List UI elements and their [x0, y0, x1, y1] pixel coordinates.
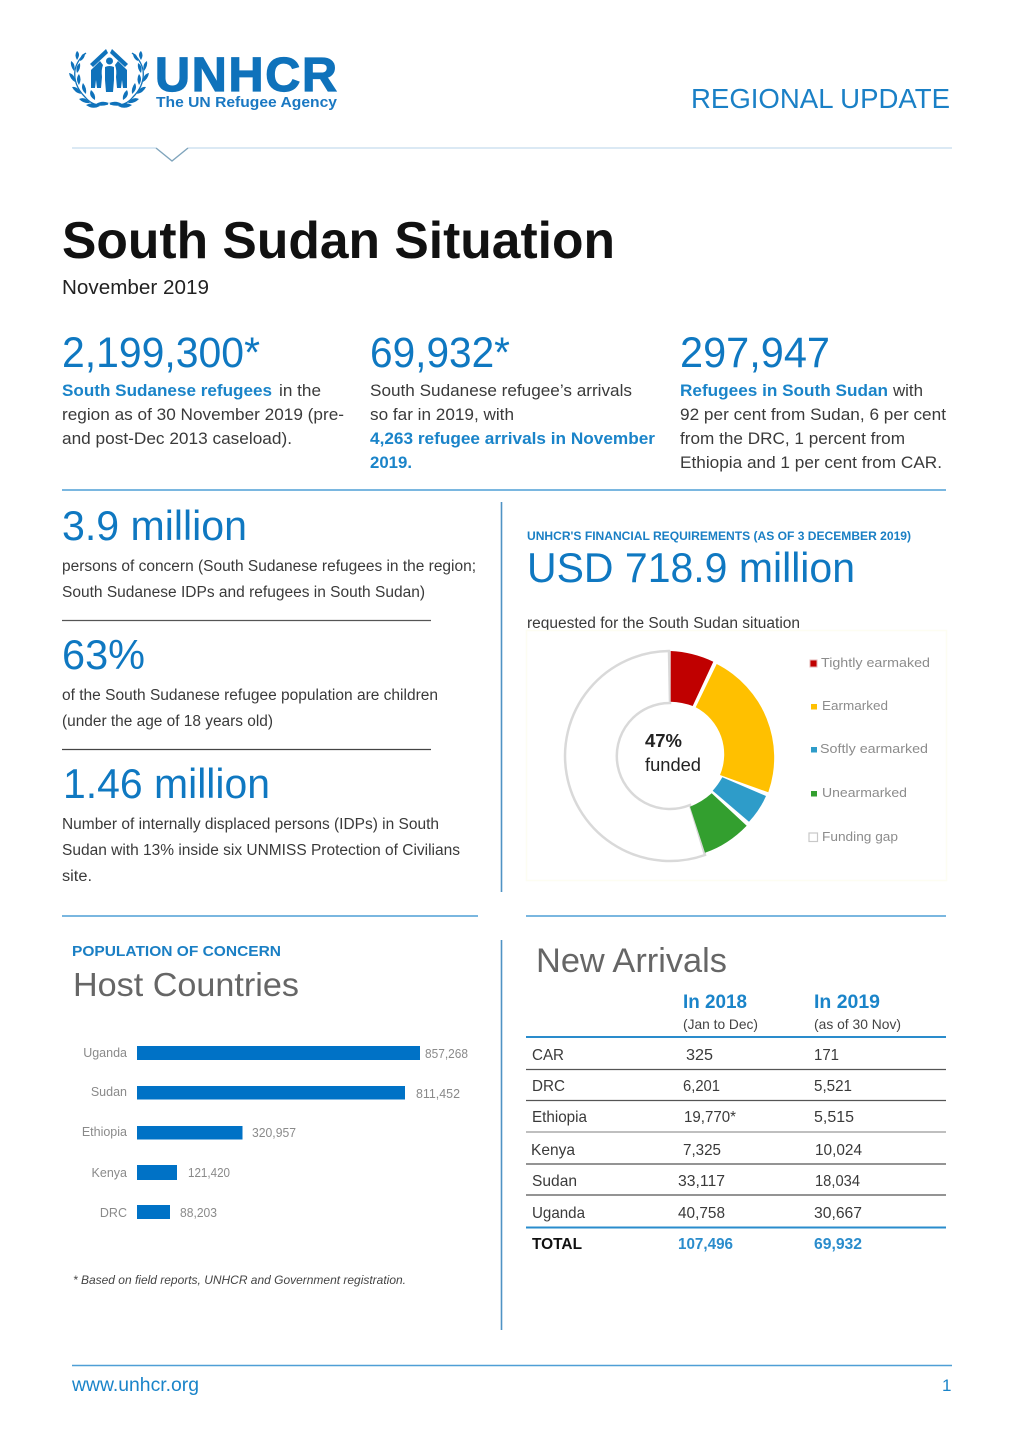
- panel: host countries: [72, 943, 468, 1287]
- panel: arrivals 2019: South Sudanese refugee’s arrivals: [370, 382, 632, 400]
- panel: arrivals 2019: 4,263 refugee arrivals in November: [370, 430, 656, 448]
- new arrivals table: Ethiopia: [532, 1109, 587, 1126]
- new arrivals table: DRC: [532, 1078, 565, 1095]
- legend: Funding gap: [822, 829, 898, 844]
- stat: 1.46 million: site.: [62, 868, 92, 885]
- stat: 1.46 million: Number of internally displaced persons (IDPs) in South: [62, 816, 439, 833]
- footer url: www.unhcr.org: [71, 1375, 199, 1396]
- bar chart: 121,420: [188, 1166, 230, 1180]
- new arrivals table: Kenya: [531, 1142, 575, 1159]
- panel: refugees in region: [62, 329, 344, 448]
- icon: UNHCR emblem: [69, 49, 149, 108]
- date: November 2019: [62, 277, 209, 299]
- bar chart: Ethiopia: [82, 1125, 127, 1139]
- new arrivals table: 325: [686, 1047, 713, 1064]
- new arrivals table: (as of 30 Nov): [814, 1016, 901, 1032]
- donut center label: funded: [645, 755, 701, 775]
- stat: 1.46 million: Sudan with 13% inside six UNMISS Protection of Civilians: [62, 842, 460, 859]
- new arrivals table: 6,201: [683, 1078, 720, 1095]
- stat: 3.9 million: persons of concern (South Sudanese refugees in the region;: [62, 558, 476, 575]
- host countries heading: Host Countries: [73, 966, 299, 1003]
- panel: refugees in South Sudan: with: [892, 382, 923, 400]
- new arrivals table: 107,496: [678, 1236, 733, 1253]
- financial subtext: requested for the South Sudan situation: [527, 615, 800, 632]
- new arrivals table: 33,117: [678, 1173, 725, 1190]
- stat: 63%: [62, 631, 438, 730]
- panel: refugees in region: South Sudanese refugees: [62, 382, 272, 400]
- panel: refugees in region: 2,199,300*: [62, 329, 260, 377]
- new arrivals table: 5,515: [814, 1109, 854, 1126]
- bar chart: Kenya: [92, 1166, 127, 1180]
- new arrivals heading: New Arrivals: [536, 942, 727, 980]
- logo: UNHCR: [69, 48, 338, 111]
- new arrivals table: 5,521: [814, 1078, 852, 1095]
- title: South Sudan Situation: [62, 212, 615, 270]
- panel: refugees in South Sudan: Refugees in South Sudan: [680, 382, 888, 400]
- legend: Unearmarked: [822, 785, 907, 800]
- bar chart: 320,957: [252, 1126, 296, 1140]
- legend: [809, 655, 930, 844]
- page number: 1: [942, 1376, 951, 1395]
- new arrivals table: Sudan: [532, 1173, 577, 1190]
- new arrivals table: Uganda: [532, 1205, 585, 1222]
- bar chart: [82, 1046, 468, 1220]
- header rule with chevron: [72, 148, 952, 161]
- bar chart: 88,203: [180, 1206, 217, 1220]
- panel: refugees in South Sudan: from the DRC, 1 percent from: [680, 430, 905, 448]
- logo tagline: The UN Refugee Agency: [156, 94, 338, 111]
- panel: refugees in South Sudan: 297,947: [680, 329, 830, 377]
- panel: arrivals 2019: so far in 2019, with: [370, 406, 514, 424]
- bar chart: 811,452: [416, 1087, 460, 1101]
- panel: refugees in region: and post-Dec 2013 caseload).: [62, 430, 292, 448]
- bar chart: Uganda: [83, 1046, 127, 1060]
- header: [69, 48, 952, 161]
- new arrivals table: In 2018: [683, 992, 747, 1013]
- panel: refugees in South Sudan: Ethiopia and 1 per cent from CAR.: [680, 454, 942, 472]
- stat: 1.46 million: [62, 760, 460, 885]
- panel: refugees in region: in the: [279, 382, 321, 400]
- donut chart: [526, 630, 946, 880]
- stat: 3.9 million: [62, 502, 476, 601]
- financial amount: USD 718.9 million: [527, 544, 855, 591]
- panel: refugees in region: region as of 30 November 2019 (pre-: [62, 406, 344, 424]
- logo wordmark: UNHCR: [155, 48, 337, 102]
- panel: refugees in South Sudan: [680, 329, 946, 472]
- new arrivals table: 30,667: [814, 1205, 862, 1222]
- softly earmarked slice: [713, 777, 766, 822]
- legend: Tightly earmaked: [821, 655, 930, 670]
- unearmarked slice: [690, 793, 747, 853]
- stat: 63%: 63%: [62, 631, 145, 678]
- panel: arrivals 2019: 2019.: [370, 454, 412, 472]
- new arrivals table: 19,770*: [684, 1109, 736, 1126]
- stat: 3.9 million: South Sudanese IDPs and refugees in South Sudan): [62, 584, 425, 601]
- panel: new arrivals: [526, 942, 946, 1253]
- funding gap slice: [565, 651, 705, 861]
- new arrivals table: 18,034: [815, 1173, 860, 1190]
- panel: arrivals 2019: 69,932*: [370, 329, 510, 377]
- panel: financial requirements: [526, 531, 946, 880]
- panel: key figures: [62, 502, 476, 885]
- new arrivals table: TOTAL: [532, 1236, 582, 1253]
- legend: Earmarked: [822, 698, 888, 713]
- new arrivals table: (Jan to Dec): [683, 1016, 758, 1032]
- new arrivals table: 40,758: [678, 1205, 725, 1222]
- tightly earmarked slice: [671, 651, 713, 706]
- host countries eyebrow: POPULATION OF CONCERN: [72, 943, 281, 960]
- legend: Softly earmarked: [820, 741, 928, 756]
- stat: 3.9 million: 3.9 million: [62, 502, 247, 549]
- footnote: * Based on field reports, UNHCR and Government registration.: [73, 1273, 406, 1287]
- stat: 63%: of the South Sudanese refugee population are children: [62, 687, 438, 704]
- stat: 63%: (under the age of 18 years old): [62, 713, 273, 730]
- new arrivals table: [526, 992, 946, 1253]
- new arrivals table: 7,325: [683, 1142, 721, 1159]
- donut center label: 47%: [645, 731, 682, 751]
- footer: [71, 1366, 952, 1396]
- regional update label: REGIONAL UPDATE: [691, 83, 950, 114]
- stat: 1.46 million: 1.46 million: [63, 760, 270, 807]
- bar chart: Sudan: [91, 1085, 127, 1099]
- panel: arrivals 2019: [370, 329, 656, 472]
- panel: refugees in South Sudan: 92 per cent from Sudan, 6 per cent: [680, 406, 946, 424]
- new arrivals table: 69,932: [814, 1236, 862, 1253]
- financial heading: UNHCR'S FINANCIAL REQUIREMENTS (AS OF 3 DECEMBER 2019): [527, 531, 911, 543]
- new arrivals table: CAR: [532, 1047, 564, 1064]
- donut center label: [645, 731, 701, 775]
- new arrivals table: In 2019: [814, 992, 880, 1013]
- earmarked slice: [696, 664, 774, 792]
- bar chart: 857,268: [425, 1047, 468, 1061]
- new arrivals table: 171: [814, 1047, 839, 1064]
- bar chart: DRC: [100, 1206, 127, 1220]
- new arrivals table: 10,024: [815, 1142, 862, 1159]
